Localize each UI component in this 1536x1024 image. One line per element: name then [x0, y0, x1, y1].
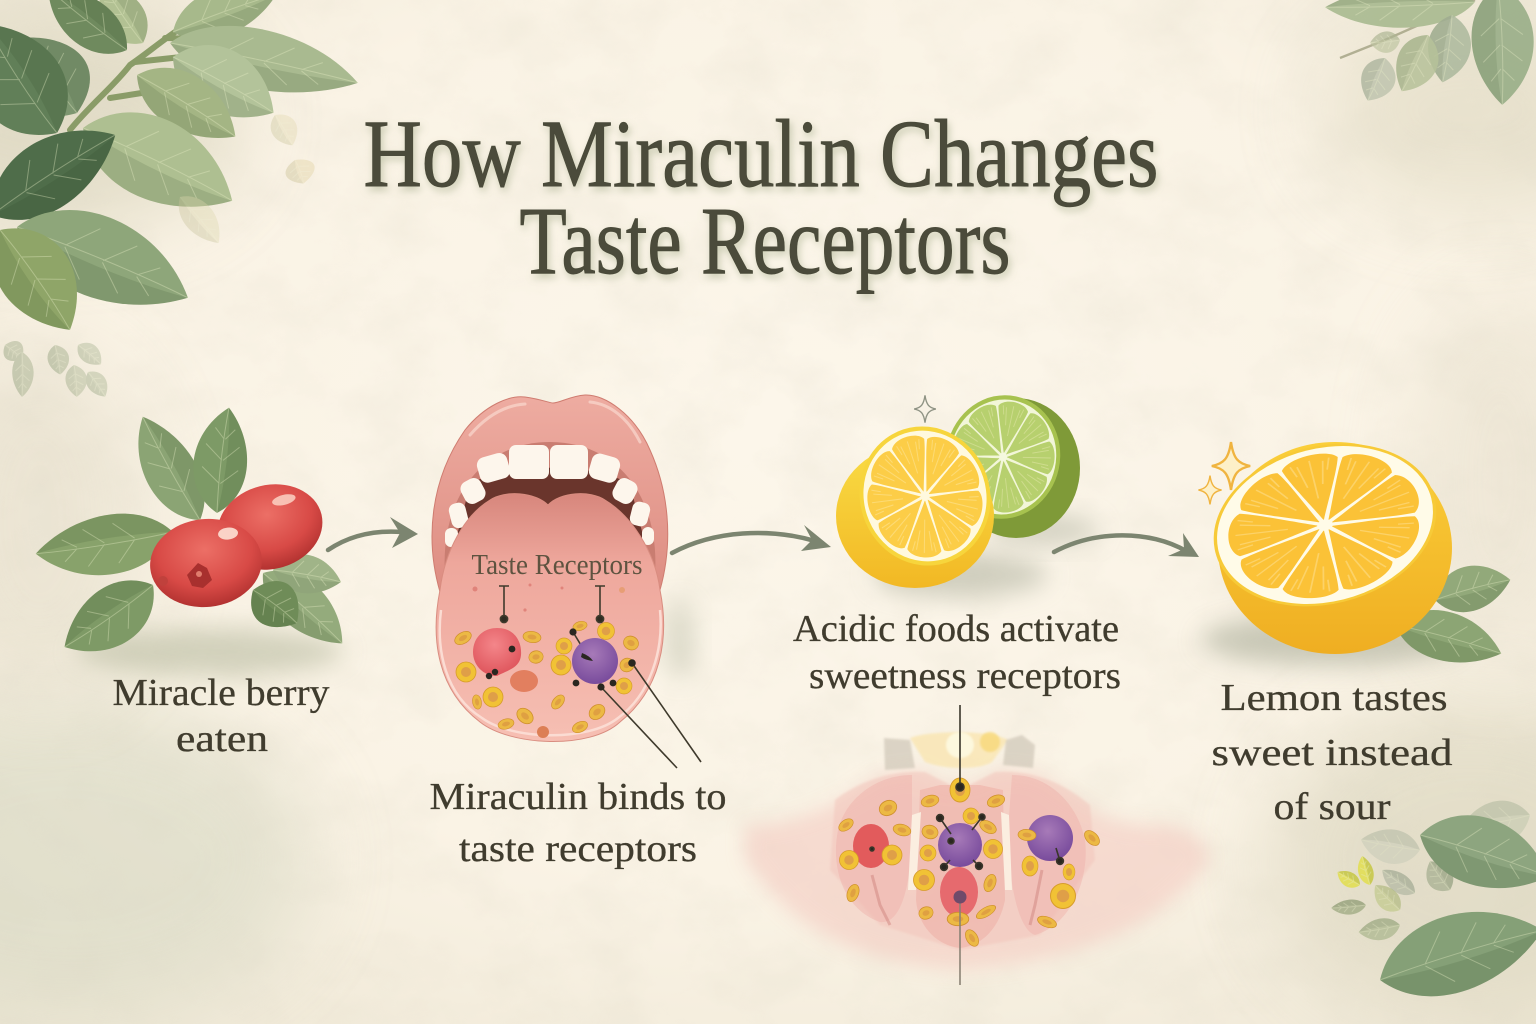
top cream bulb [910, 732, 1008, 768]
foliage: bottom right [1331, 796, 1536, 1014]
arrow: mouth to citrus [672, 525, 831, 553]
step 1 label [112, 672, 330, 760]
berry calyx [158, 563, 212, 588]
step 4 label: Lemon tastes [1220, 677, 1448, 719]
foliage: faded sprigs top left [0, 108, 319, 402]
step 1 label: Miracle berry [112, 672, 330, 714]
pink tissue wash [745, 770, 1210, 970]
step 1: miracle berries illustration [31, 404, 359, 676]
step 2: mouth and tongue illustration [432, 395, 701, 768]
leader lines and dots [870, 705, 1063, 985]
receptor: red [473, 628, 538, 692]
receptor binding dots [486, 628, 636, 691]
mouth cavity [445, 442, 655, 575]
taste buds [836, 778, 1102, 949]
step 2 label [430, 776, 726, 870]
step 3: lemon and lime illustration [836, 385, 1100, 597]
step 3 label: sweetness receptors [809, 655, 1121, 697]
tongue [436, 494, 664, 742]
label: taste receptors: Taste Receptors [472, 550, 642, 581]
step 3 label [793, 608, 1121, 697]
title: Taste Receptors [520, 187, 1010, 294]
lemon [836, 409, 1008, 588]
sparkle [914, 395, 936, 423]
tissue lobes [836, 775, 912, 922]
arrow: berry to mouth [328, 517, 418, 550]
step 3 label: Acidic foods activate [793, 608, 1119, 650]
receptor: purple [572, 638, 618, 684]
foliage: top left branch [0, 0, 365, 349]
tongue specks [472, 584, 625, 612]
foliage: top right [1324, 0, 1536, 108]
title [364, 100, 1158, 294]
cream slits [908, 812, 1012, 890]
taste buds [452, 620, 641, 738]
step 4 label [1212, 677, 1452, 828]
grey shoulders [884, 738, 915, 770]
step 1 label: eaten [176, 718, 268, 760]
step 2 label: taste receptors [459, 828, 697, 870]
step 4 label: sweet instead [1212, 732, 1452, 774]
upper lip [432, 395, 668, 592]
step 4: sweet lemon illustration [1196, 421, 1516, 675]
step 4 label: of sour [1274, 786, 1391, 828]
receptors [853, 815, 1073, 917]
receptor leader lines [499, 586, 701, 768]
title: How Miraculin Changes [364, 100, 1158, 207]
lime [934, 385, 1080, 538]
sparkles [1198, 442, 1250, 504]
step 2 label: Miraculin binds to [430, 776, 726, 818]
arrow: citrus to sweet lemon [1054, 533, 1199, 557]
teeth [445, 445, 654, 547]
step 3 detail: receptor cross-section [745, 705, 1210, 985]
